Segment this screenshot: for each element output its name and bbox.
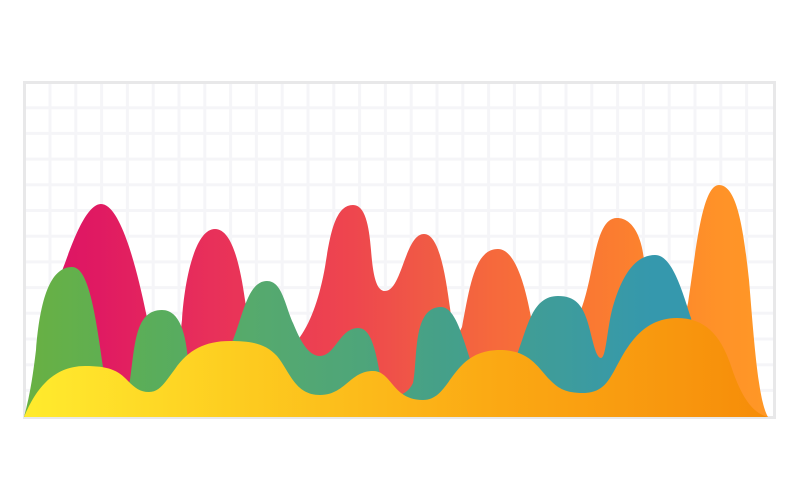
grid background — [24, 82, 775, 418]
area: yellow to orange series — [24, 318, 768, 417]
area: pink to orange series — [24, 185, 768, 417]
area: green to teal series — [24, 255, 700, 417]
